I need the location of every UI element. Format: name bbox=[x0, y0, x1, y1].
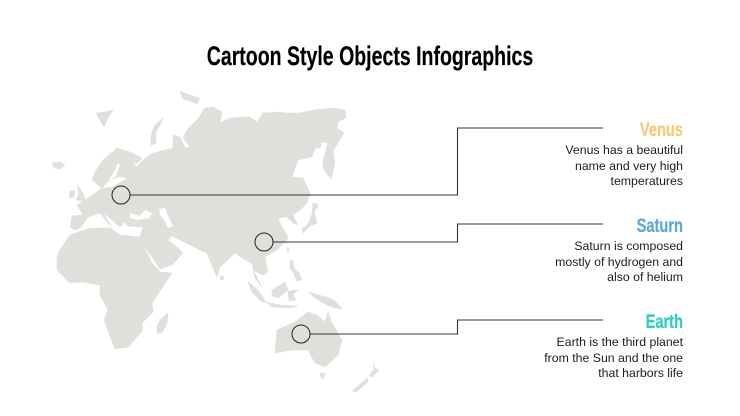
map: Franz Josef Land bbox=[180, 91, 200, 104]
map: Madagascar bbox=[157, 313, 168, 333]
marker: Saturn bbox=[255, 233, 273, 251]
title: Cartoon Style Objects Infographics bbox=[207, 41, 533, 71]
map: Baltic Sea bbox=[102, 163, 127, 188]
text block: Saturn bbox=[555, 216, 683, 284]
map: Caspian Sea bbox=[159, 208, 173, 228]
text block: Saturn: Saturn is composed bbox=[574, 239, 683, 253]
map: Novaya Zemlya bbox=[151, 118, 163, 145]
map: Sulawesi bbox=[288, 290, 298, 301]
marker: Earth bbox=[292, 325, 310, 343]
map: Sri Lanka bbox=[220, 276, 224, 280]
text block: Venus: Venus has a beautiful bbox=[565, 143, 683, 157]
map: New Zealand north bbox=[369, 362, 379, 377]
map: New Zealand south bbox=[352, 378, 368, 392]
map: Borneo bbox=[272, 282, 288, 298]
map: Tasmania bbox=[320, 373, 325, 379]
map: Philippines bbox=[290, 260, 302, 281]
connector: Saturn bbox=[255, 224, 603, 251]
text block: Saturn: Saturn bbox=[637, 216, 683, 236]
map: Black Sea bbox=[130, 210, 152, 220]
map: Java bbox=[266, 302, 298, 308]
map: Taiwan bbox=[287, 247, 289, 252]
map: Sumatra bbox=[248, 282, 266, 302]
text block: Earth: Earth bbox=[646, 312, 683, 332]
map: Australia bbox=[275, 312, 342, 367]
connector: Earth bbox=[292, 320, 603, 343]
map: Eurasia bbox=[70, 107, 346, 287]
marker: Venus bbox=[112, 186, 130, 204]
text block: Earth: that harbors life bbox=[598, 366, 683, 380]
text block: Saturn: mostly of hydrogen and bbox=[555, 254, 683, 268]
text block: Earth bbox=[544, 312, 683, 380]
text block: Venus: temperatures bbox=[611, 174, 683, 188]
text block: Venus: name and very high bbox=[575, 158, 683, 172]
map: Japan bbox=[302, 203, 318, 233]
map: Africa bbox=[57, 228, 172, 349]
text block: Earth: from the Sun and the one bbox=[544, 350, 683, 364]
text block: Venus bbox=[565, 120, 683, 188]
text block: Venus: Venus bbox=[640, 120, 683, 140]
map: Great Britain bbox=[76, 185, 85, 201]
map: land masses bbox=[52, 91, 379, 392]
text block: Saturn: also of helium bbox=[607, 270, 683, 284]
map: Iceland bbox=[52, 162, 65, 169]
connector: Venus bbox=[112, 128, 603, 204]
map: New Guinea bbox=[309, 292, 342, 309]
map: Ireland bbox=[69, 191, 75, 198]
text block: Earth: Earth is the third planet bbox=[557, 335, 683, 349]
map: Svalbard bbox=[96, 110, 113, 127]
